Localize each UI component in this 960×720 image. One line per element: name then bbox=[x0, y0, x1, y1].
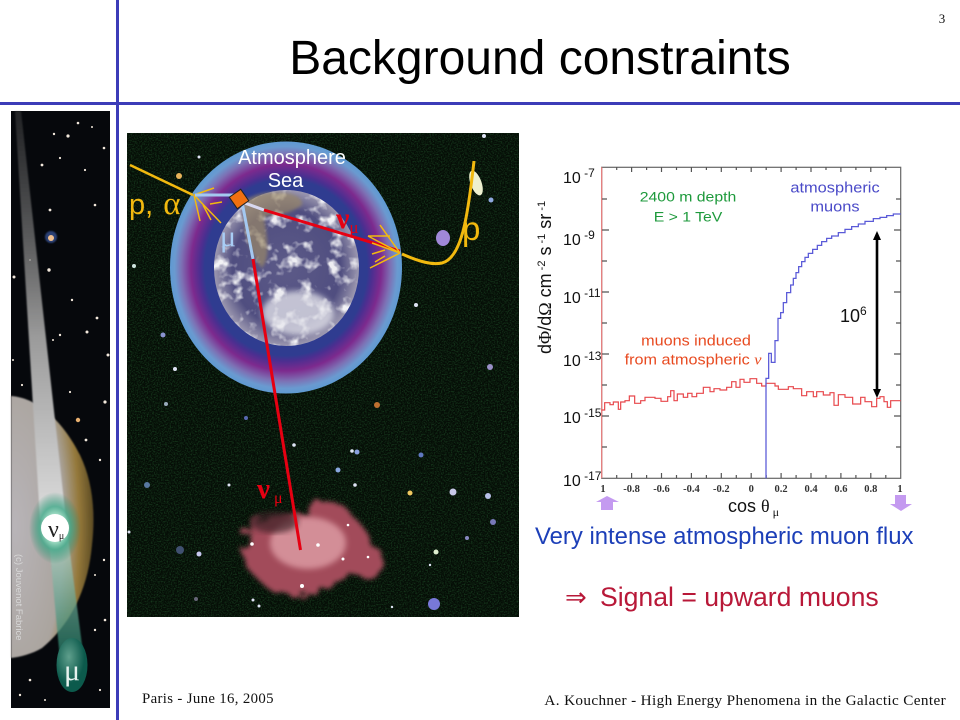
icon: muon sphere bbox=[56, 638, 88, 692]
icon: planet bbox=[11, 396, 94, 658]
icon: stars in left panel bbox=[12, 122, 110, 701]
y-axis tick labels bbox=[563, 166, 602, 490]
yellow cosmic ray left bbox=[130, 165, 193, 195]
copyright: (c) Jouvenot Fabrice bbox=[13, 554, 24, 641]
label: ten to the six: 6 bbox=[860, 304, 867, 318]
label: p alpha: p, α bbox=[129, 186, 180, 222]
nebula bbox=[240, 501, 381, 598]
muon track from atmosphere bbox=[195, 194, 237, 196]
label: sea: Sea bbox=[268, 170, 304, 192]
y-axis tick labels: 10 bbox=[563, 353, 581, 370]
plot frame bbox=[602, 167, 901, 478]
axis ticks bbox=[602, 167, 901, 478]
page number: 3 bbox=[939, 11, 945, 26]
conclusion: signal: Signal = upward muons bbox=[600, 582, 879, 612]
y-axis tick labels: 10 bbox=[563, 170, 581, 187]
y-axis tick labels: -9 bbox=[581, 228, 595, 242]
label: nu mu bottom: μ bbox=[270, 490, 283, 507]
arrow: upward signal bbox=[596, 496, 619, 510]
red neutrino track down bbox=[253, 259, 300, 550]
x-axis tick labels: -0.2 bbox=[713, 484, 730, 495]
neutrino label: ν bbox=[48, 517, 59, 543]
x-axis tick labels: 1 bbox=[600, 484, 606, 495]
label: induced muons: from atmospheric ν bbox=[625, 352, 761, 368]
icon: muon trail bbox=[48, 530, 84, 660]
conclusion: signal: ⇒ bbox=[565, 583, 587, 613]
earth globe bbox=[214, 190, 359, 346]
x-axis tick labels: 1 bbox=[897, 484, 903, 495]
y-axis title: -1 bbox=[536, 234, 548, 247]
label: nu mu bottom: ν bbox=[257, 473, 270, 505]
muon label: μ bbox=[64, 654, 80, 687]
y-axis title: sr bbox=[535, 214, 555, 234]
icon: neutrino beam bbox=[15, 111, 66, 520]
label: atmospheric muons: muons bbox=[810, 199, 860, 215]
label: depth: E > 1 TeV bbox=[654, 209, 722, 225]
x-axis tick labels: 0.6 bbox=[834, 484, 847, 495]
blue histogram bbox=[766, 214, 901, 478]
x-axis tick labels: 0.2 bbox=[775, 484, 788, 495]
footer: author: A. Kouchner - High Energy Phenomena in the Galactic Center bbox=[544, 692, 946, 709]
red neutrino track right bbox=[264, 210, 400, 251]
title: Background constraints bbox=[289, 32, 791, 85]
y-axis tick labels: 10 bbox=[563, 473, 581, 490]
y-axis title: dΦ/dΩ cm bbox=[535, 273, 555, 354]
yellow proton curve right bbox=[402, 161, 474, 264]
label: induced muons: muons induced bbox=[641, 333, 751, 349]
arrow: downward bbox=[890, 495, 912, 511]
y-axis title: -1 bbox=[536, 201, 548, 214]
label: ten to the six: 10 bbox=[840, 306, 860, 326]
shower fan right bbox=[368, 225, 400, 268]
y-axis tick labels: -13 bbox=[581, 349, 602, 363]
chart: muon flux bbox=[535, 166, 912, 519]
panel: cosmic diagram bbox=[127, 133, 519, 617]
y-axis tick labels: -17 bbox=[581, 469, 602, 483]
muon track upward bbox=[242, 202, 253, 259]
label: mu: μ bbox=[220, 220, 236, 253]
label: p: p bbox=[462, 210, 480, 247]
y-axis tick labels: 10 bbox=[563, 232, 581, 249]
shower fan left bbox=[194, 188, 222, 223]
y-axis tick labels: -11 bbox=[581, 286, 601, 300]
atmosphere and sea layers bbox=[170, 142, 402, 394]
x-axis title: μ bbox=[770, 505, 779, 519]
label: atmosphere: Atmosphere bbox=[238, 147, 346, 169]
x-axis tick labels: -0.6 bbox=[653, 484, 670, 495]
label: nu mu right: μ bbox=[349, 218, 359, 237]
x-axis tick labels: 0.4 bbox=[804, 484, 818, 495]
icon: detector bbox=[229, 189, 249, 209]
x-axis tick labels: 0 bbox=[749, 484, 754, 495]
neutrino label: μ bbox=[59, 531, 64, 542]
y-axis tick labels: 10 bbox=[563, 410, 581, 427]
footer: date: Paris - June 16, 2005 bbox=[142, 691, 274, 707]
x-axis tick labels: -0.4 bbox=[683, 484, 700, 495]
sky stars bbox=[128, 134, 496, 610]
label: atmospheric muons: atmospheric bbox=[790, 180, 880, 196]
arrow: 10^6 gap bbox=[873, 231, 881, 398]
x-axis tick labels: 0.8 bbox=[864, 484, 877, 495]
panel: neutrino illustration bbox=[11, 111, 110, 708]
label: depth: 2400 m depth bbox=[640, 189, 736, 205]
x-axis tick labels: -0.8 bbox=[623, 484, 640, 495]
x-axis title: cos θ bbox=[728, 496, 770, 516]
caption: intense flux: Very intense atmospheric muon flux bbox=[535, 523, 914, 550]
y-axis tick labels: 10 bbox=[563, 290, 581, 307]
y-axis title: -2 bbox=[536, 261, 548, 273]
x-axis tick labels bbox=[600, 484, 903, 495]
icon: neutrino glow bbox=[29, 492, 81, 564]
y-axis title: s bbox=[535, 247, 555, 261]
y-axis tick labels: -15 bbox=[581, 406, 602, 420]
y-axis tick labels: -7 bbox=[581, 166, 595, 180]
red histogram bbox=[602, 379, 901, 410]
label: nu mu right: ν bbox=[336, 202, 349, 235]
muon track short bbox=[242, 202, 264, 210]
